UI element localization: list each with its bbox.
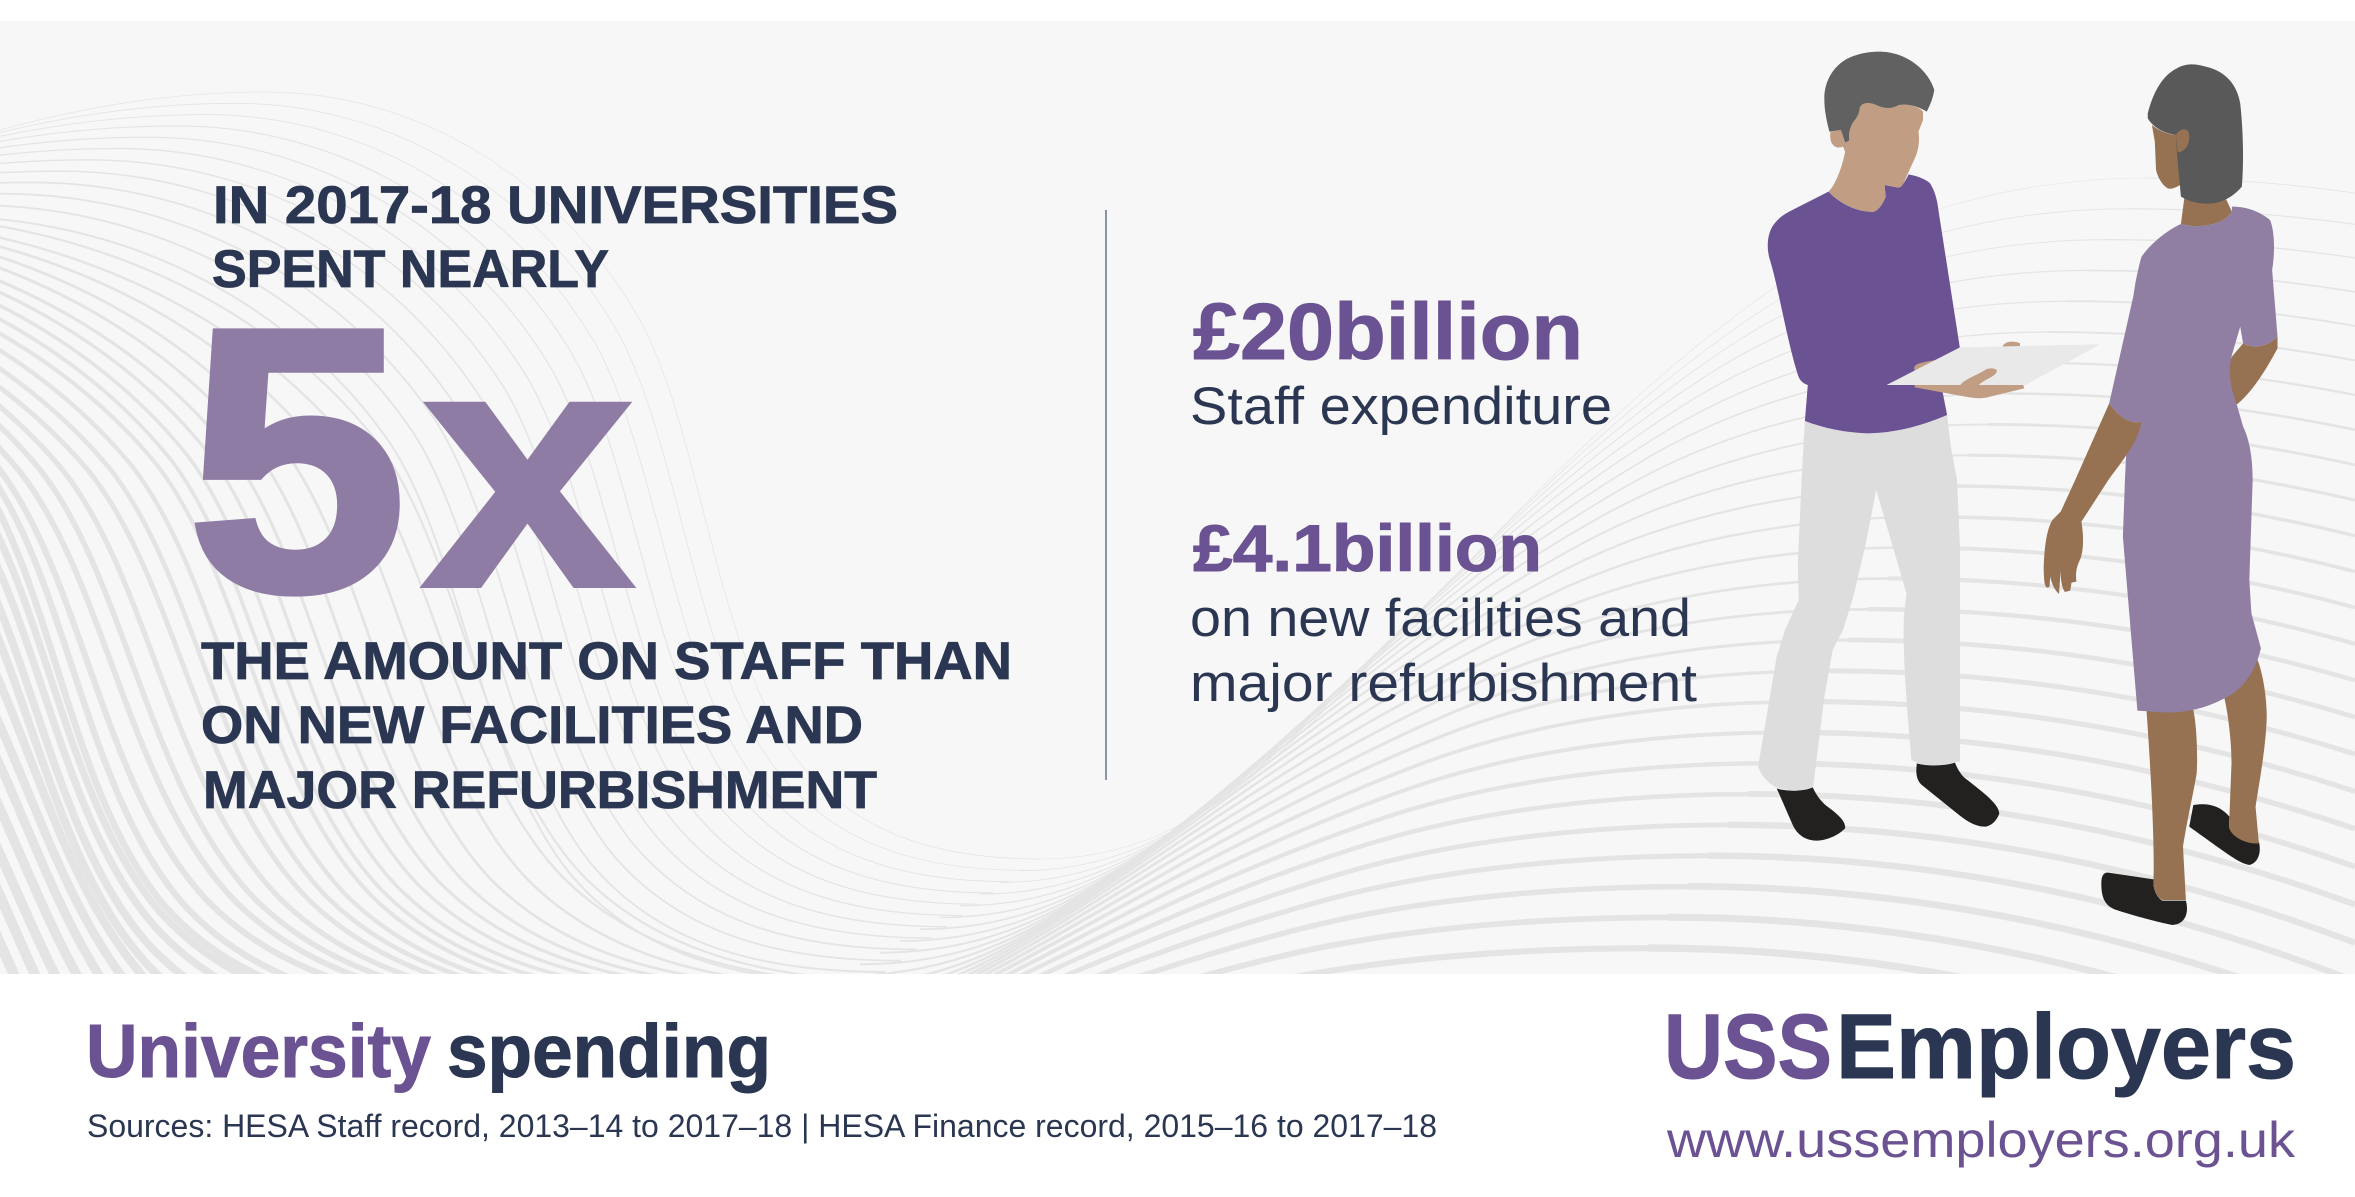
woman near arm and hand [2044,403,2142,594]
stat: new facilities: £4.1billion [1193,511,1542,585]
woman dress [2109,207,2278,713]
stat: new facilities [1190,511,1697,713]
illustration: woman in dress [2044,64,2278,925]
woman front leg and shoe [2101,710,2197,925]
footer title: university spending: University [86,1009,431,1093]
logo: USS Employers: USS [1664,996,1832,1098]
footer title: university spending: spending [447,1009,771,1093]
woman face [2152,125,2183,189]
stat: staff expenditure: Staff expenditure [1190,377,1612,436]
man trousers [1758,415,1960,790]
text block: the amount on staff: ON NEW FACILITIES AND [201,696,863,755]
man hair [1824,52,1934,143]
man hands and tablet [1887,342,2100,398]
stat: staff expenditure [1190,287,1612,436]
man shoes [1777,763,1999,841]
text block: the amount on staff: THE AMOUNT ON STAFF THAN [201,632,1012,691]
illustration: man holding tablet [1758,52,2100,841]
woman back leg and shoe [2189,660,2267,865]
website url: www.ussemployers.org.uk [1666,1112,2296,1168]
woman hair [2148,64,2243,204]
text block: the amount on staff: MAJOR REFURBISHMENT [203,761,877,820]
stat: new facilities: on new facilities and [1190,589,1691,648]
woman ear [2176,129,2189,152]
footer title: university spending [86,1009,771,1093]
big number: 5x: x [421,274,637,660]
heading: in 2017-18 universities spent nearly: IN 2017-18 UNIVERSITIES [213,176,898,235]
sources line: Sources: HESA Staff record, 2013–14 to 2017–18 | HESA Finance record, 2015–16 to 2017–18 [87,1108,1437,1144]
logo: USS Employers: Employers [1836,996,2296,1098]
heading: in 2017-18 universities spent nearly: SPENT NEARLY [212,240,609,299]
panel: main grey background [0,21,2355,974]
stat: new facilities: major refurbishment [1190,654,1697,713]
man head and neck [1829,103,1923,212]
vertical divider [1105,210,1107,780]
stat: staff expenditure: £20billion [1193,287,1583,376]
woman neck [2181,198,2232,226]
big number: 5x [186,250,637,671]
woman far arm [2229,337,2278,405]
heading: in 2017-18 universities spent nearly [212,176,898,299]
text block: the amount on staff [201,632,1012,820]
man shirt [1768,174,1960,433]
big number: 5x: 5 [186,250,408,671]
